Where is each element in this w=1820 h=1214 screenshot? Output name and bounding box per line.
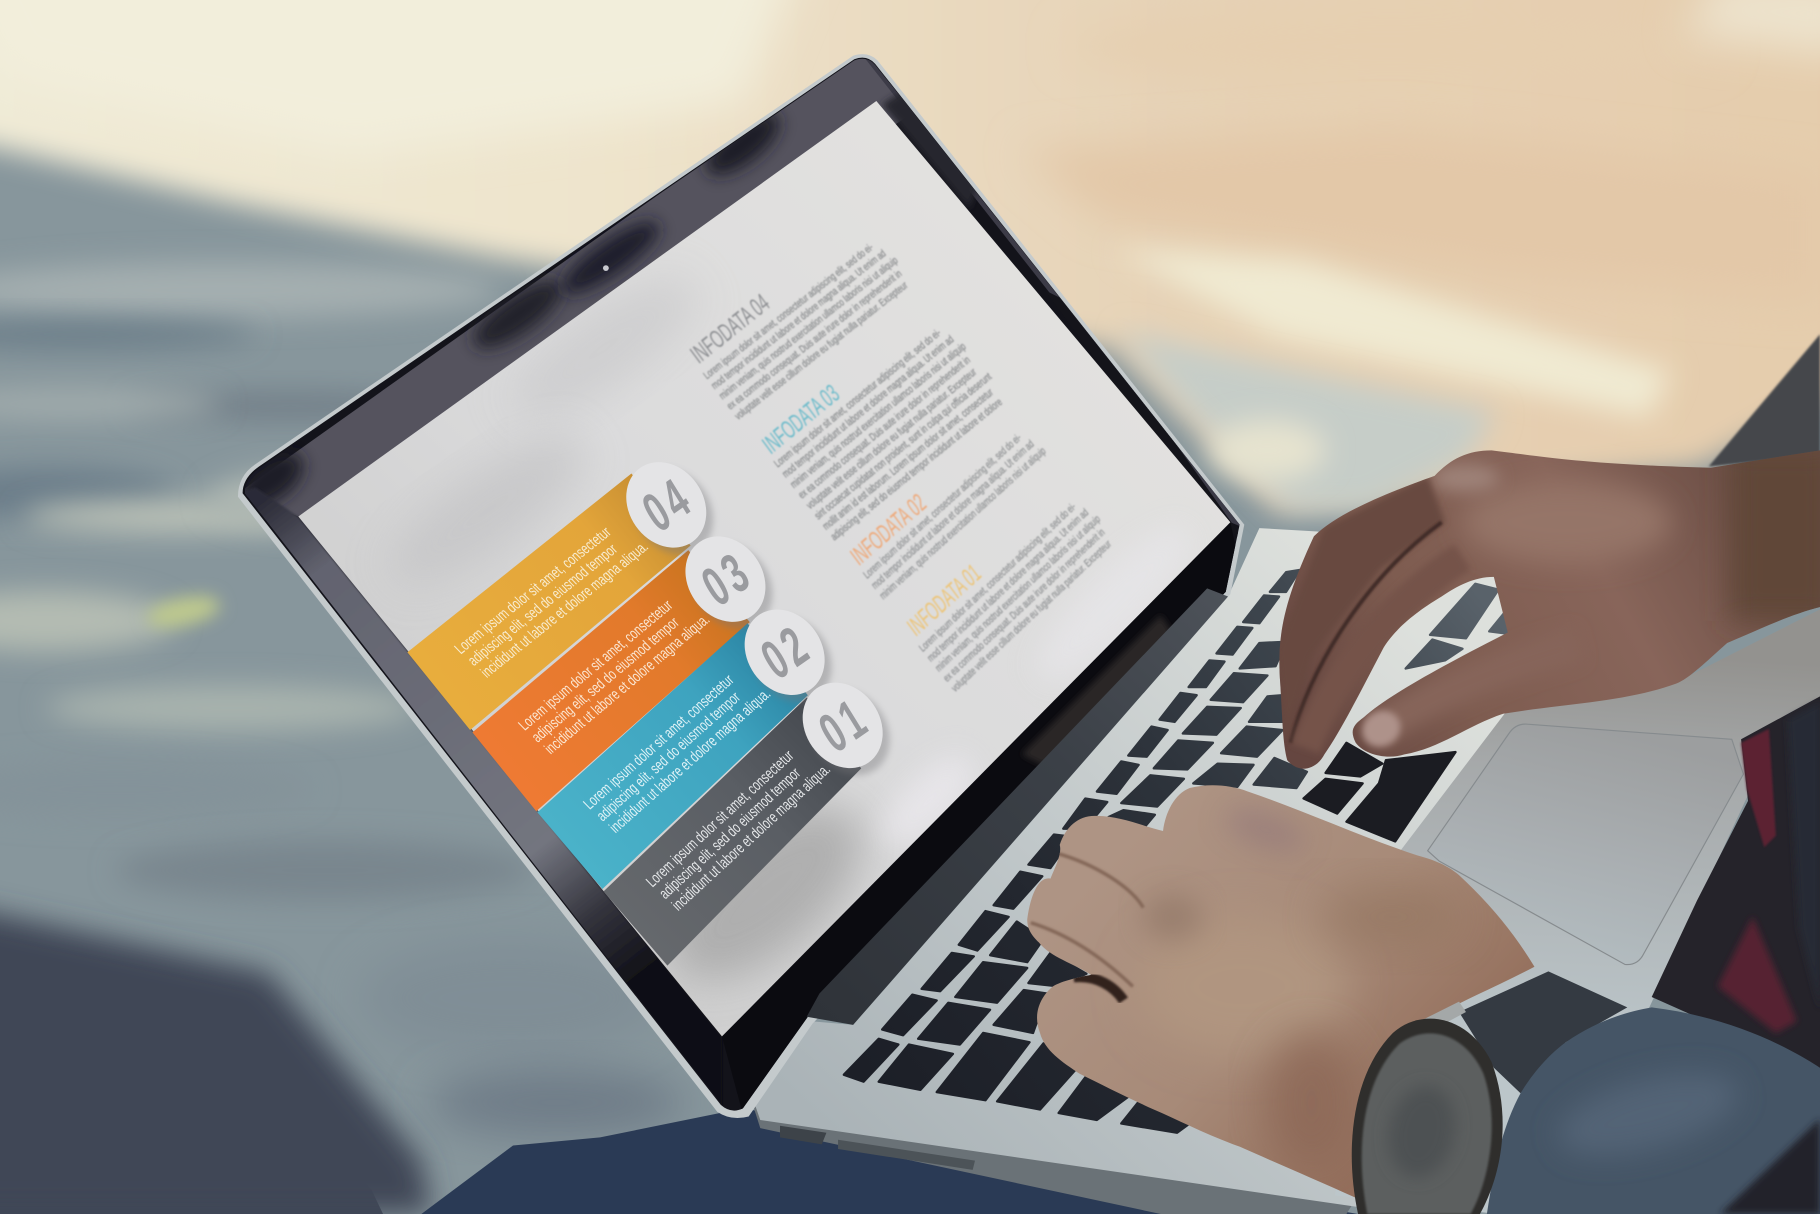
ribbon text 01: adipiscing elit, sed do eiusmod tempor xyxy=(656,764,804,902)
heading 03: INFODATA 03 xyxy=(758,379,845,460)
body 02: mod tempor incididunt ut labore et dolore magna aliqua. Ut enim ad xyxy=(869,438,1036,591)
ribbon text 02: incididunt ut labore et dolore magna aliqua. xyxy=(606,685,774,836)
ribbon text 04: incididunt ut labore et dolore magna aliqua. xyxy=(477,538,652,681)
lower-left bezel reflection xyxy=(248,488,647,968)
bezel reflections xyxy=(228,52,1259,1114)
number row xyxy=(879,642,1286,1090)
body 03: adipiscing elit, sed do eiusmod tempor incididunt ut labore et dolore xyxy=(828,396,1004,543)
sunlit cream and peach area xyxy=(0,0,1820,511)
function row xyxy=(844,570,1300,1082)
wristwatch xyxy=(1352,1019,1503,1214)
navy foreground blur xyxy=(0,899,432,1214)
base side edge with ports xyxy=(752,1103,1358,1214)
shirt sleeve xyxy=(1487,1007,1820,1214)
ribbon text 04: Lorem ipsum dolor sit amet, consectetur xyxy=(451,523,615,657)
black bezel xyxy=(243,58,1240,1111)
N key and space bar xyxy=(1303,743,1456,841)
body 01: Lorem ipsum dolor sit amet, consectetur adipiscing elit, sed do ei- xyxy=(917,500,1078,654)
body 01: voluptate velit esse cillum dolore eu fugiat nulla pariatur. Excepteur xyxy=(949,538,1113,694)
body 03: mod tempor incididunt ut labore et dolore magna aliqua. Ut enim ad xyxy=(780,333,956,480)
body 01: mod tempor incididunt ut labore et dolore magna aliqua. Ut enim ad xyxy=(925,506,1090,664)
ribbon text 01: Lorem ipsum dolor sit amet, consectetur xyxy=(643,746,797,890)
body 03: minim veniam, quis nostrud exercitation ullamco laboris nisi ut aliquip xyxy=(788,340,968,490)
laptop base xyxy=(421,528,1820,1214)
badge 04: 04 xyxy=(632,464,703,544)
jeans under laptop xyxy=(421,1108,1358,1214)
body 01: minim veniam, quis nostrud exercitation ullamco laboris nisi ut aliquip xyxy=(933,513,1102,674)
trackpad xyxy=(1428,724,1743,965)
letter rows and bottom row xyxy=(937,695,1307,1133)
lower left hand xyxy=(1027,785,1534,1198)
body 04: mod tempor incididunt ut labore et dolore magna aliqua. Ut enim ad xyxy=(709,247,888,392)
ribbon 02: blue xyxy=(537,623,808,889)
upper right hand xyxy=(1277,447,1820,769)
body 02: Lorem ipsum dolor sit amet, consectetur adipiscing elit, sed do ei- xyxy=(861,431,1023,581)
body 01: ex ea commodo consequat. Duis aute irure dolor in reprehenderit in xyxy=(941,526,1107,684)
silver lid edge xyxy=(238,54,1244,1118)
text block: Infodata 02 xyxy=(846,424,1048,602)
far right keys xyxy=(1406,584,1508,669)
palm rest right side xyxy=(1335,609,1820,1214)
ribbon text 01: incididunt ut labore et dolore magna aliqua. xyxy=(668,760,834,914)
badge 02 xyxy=(728,594,848,718)
badge 01 xyxy=(786,667,906,791)
ribbon text 03: adipiscing elit, sed do eiusmod tempor xyxy=(528,614,683,746)
hinge band xyxy=(807,588,1228,1025)
body 03: ex ea commodo consequat. Duis aute irure dolor in reprehenderit in xyxy=(796,354,972,501)
body 04: minim veniam, quis nostrud exercitation ullamco laboris nisi ut aliquip xyxy=(717,254,900,402)
body 03: Lorem ipsum dolor sit amet, consectetur adipiscing elit, sed do ei- xyxy=(772,327,943,470)
body 04: ex ea commodo consequat. Duis aute irure dolor in reprehenderit in xyxy=(725,268,904,412)
darker far finger xyxy=(1277,476,1445,743)
body 04: Lorem ipsum dolor sit amet, consectetur adipiscing elit, sed do ei- xyxy=(701,241,875,381)
shadow between fingers xyxy=(1074,977,1124,1000)
pavement streaks xyxy=(0,262,685,1137)
badge 03 xyxy=(669,521,789,644)
top bezel tone xyxy=(238,52,917,516)
back of hand highlight xyxy=(1462,482,1671,563)
body 03: sint occaecat cupidatat non proident, sunt in culpa qui officia deserunt xyxy=(812,370,994,522)
body 04: voluptate velit esse cillum dolore eu fugiat nulla pariatur. Excepteur xyxy=(732,279,910,422)
keyboard deck xyxy=(752,528,1509,1214)
heading 04: INFODATA 04 xyxy=(686,289,775,369)
knuckle creases xyxy=(1056,853,1143,908)
wrist shade xyxy=(1729,447,1820,621)
ribbon 01: grey xyxy=(604,698,861,966)
right bezel xyxy=(865,58,1259,534)
text block: Infodata 04 xyxy=(686,234,915,422)
ribbon text 02: Lorem ipsum dolor sit amet, consectetur xyxy=(580,671,737,813)
body 03: mollit anim id est laborum. Lorem ipsum dolor sit amet, consectetur xyxy=(820,386,995,532)
gap shadow between fingers xyxy=(1291,522,1442,743)
index finger xyxy=(1306,557,1462,749)
text block: Infodata 01 xyxy=(903,493,1118,694)
ribbon text 03: Lorem ipsum dolor sit amet, consectetur xyxy=(515,596,676,734)
badge 02: 02 xyxy=(751,611,821,691)
ribbon text 03: incididunt ut labore et dolore magna aliqua. xyxy=(541,611,713,757)
ribbon 04: yellow xyxy=(407,474,691,730)
badge 01: 01 xyxy=(809,685,880,765)
body 03: voluptate velit esse cillum dolore eu fugiat nulla pariatur. Excepteur xyxy=(804,366,978,511)
watch case xyxy=(1352,1019,1503,1214)
thumb nail xyxy=(1358,708,1404,750)
heading 01: INFODATA 01 xyxy=(903,559,986,642)
lower-right black bezel xyxy=(722,522,1248,1114)
ribbon text 02: adipiscing elit, sed do eiusmod tempor xyxy=(593,688,744,824)
ribbon text 04: adipiscing elit, sed do eiusmod tempor xyxy=(464,540,621,669)
webcam xyxy=(603,265,609,271)
badge 03: 03 xyxy=(691,538,762,618)
watch strap xyxy=(1424,971,1627,1093)
heading 02: INFODATA 02 xyxy=(846,489,931,571)
screen: infographic slide xyxy=(298,101,1230,1036)
shirt on the right edge xyxy=(1652,696,1820,1091)
ribbon 03: orange xyxy=(472,550,750,811)
thumb xyxy=(1370,667,1504,737)
keyboard keys xyxy=(844,570,1508,1133)
laptop lid xyxy=(228,52,1259,1118)
text block: Infodata 03 xyxy=(758,318,1010,543)
dark ledge at the far right xyxy=(1709,334,1820,467)
badge 04 xyxy=(610,446,730,570)
watch dial xyxy=(1362,1033,1492,1214)
body 02: minim veniam, quis nostrud exercitation ullamco laboris nisi ut aliquip xyxy=(877,445,1048,602)
